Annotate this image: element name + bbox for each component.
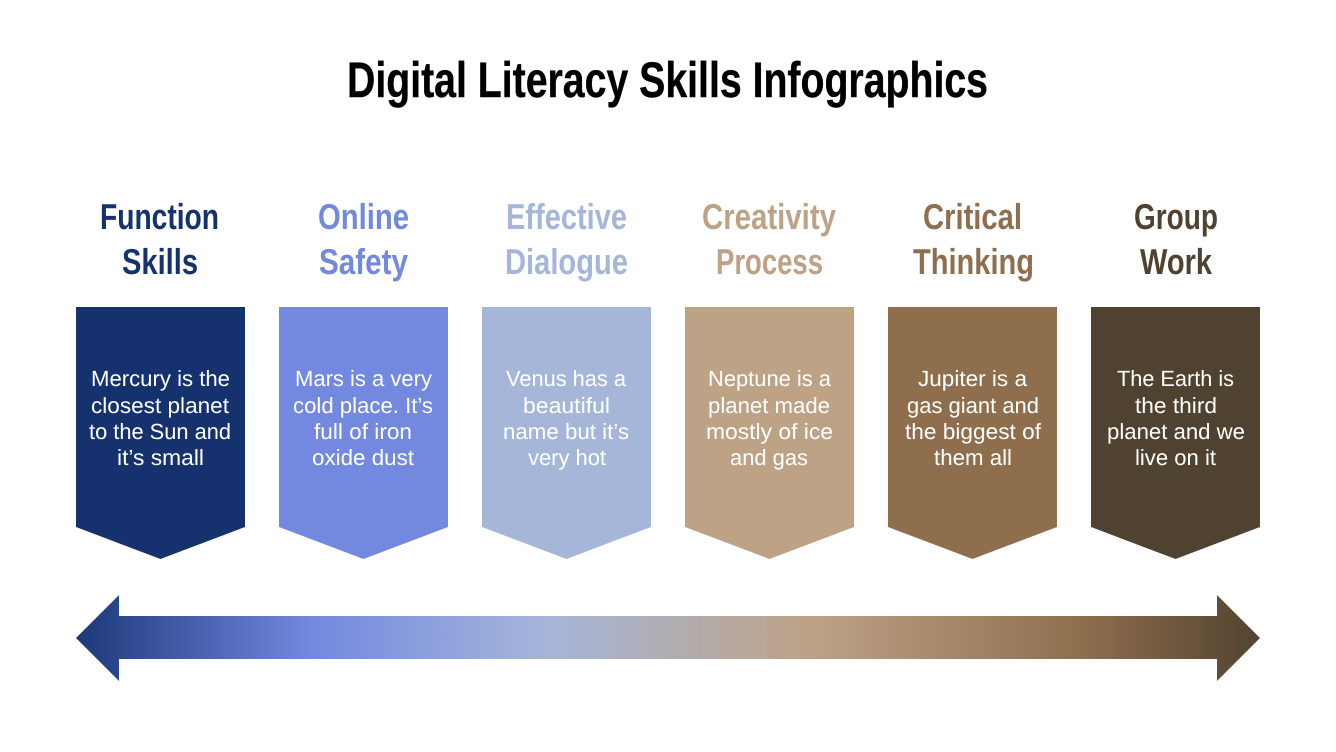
text block: mars: Mars is a very [295, 366, 432, 391]
heading: effective dialogue: Dialogue [505, 241, 628, 282]
heading: online safety: Safety [319, 241, 408, 282]
heading: creativity process: Creativity [702, 196, 836, 237]
heading: creativity process [702, 196, 836, 282]
text block: venus [503, 366, 629, 470]
text block: neptune: Neptune is a [708, 366, 832, 391]
text block: earth: the third [1135, 393, 1217, 418]
text block: jupiter: Jupiter is a [918, 366, 1028, 391]
text block: mercury: to the Sun and [89, 419, 231, 444]
text block: mars: oxide dust [312, 445, 414, 470]
heading: creativity process: Process [716, 241, 823, 282]
text block: venus: name but it’s [503, 419, 629, 444]
text block: venus: very hot [528, 445, 606, 470]
heading: function skills: Skills [122, 241, 198, 282]
card shape: effective dialogue [482, 307, 651, 559]
text block: mercury: it’s small [117, 445, 204, 470]
heading: online safety: Online [318, 196, 409, 237]
text block: venus: Venus has a [506, 366, 627, 391]
heading: function skills: Function [100, 196, 219, 237]
text block: mercury [89, 366, 231, 470]
panel: group work [1091, 196, 1260, 559]
text block: jupiter: them all [934, 445, 1012, 470]
panel: critical thinking [888, 196, 1057, 559]
text block: neptune [706, 366, 833, 470]
text block: jupiter [905, 366, 1042, 470]
title: Digital Literacy Skills Infographics [347, 52, 988, 108]
panel: creativity process [685, 196, 854, 559]
text block: venus: beautiful [523, 393, 610, 418]
heading: critical thinking: Thinking [913, 241, 1034, 282]
heading: online safety [318, 196, 409, 282]
heading: effective dialogue [505, 196, 628, 282]
heading: effective dialogue: Effective [506, 196, 627, 237]
text block: mars: full of iron [314, 419, 412, 444]
text block: mercury: closest planet [91, 393, 229, 418]
text block: mercury: Mercury is the [91, 366, 230, 391]
text block: earth: live on it [1135, 445, 1216, 470]
heading: group work: Group [1134, 196, 1218, 237]
card shape: critical thinking [888, 307, 1057, 559]
text block: neptune: planet made [708, 393, 830, 418]
card shape: creativity process [685, 307, 854, 559]
text block: mars: cold place. It’s [293, 393, 433, 418]
arrow: double-headed gradient [76, 595, 1260, 681]
panel: function skills [76, 196, 245, 559]
text block: earth: planet and we [1107, 419, 1245, 444]
text block: jupiter: the biggest of [905, 419, 1042, 444]
text block: neptune: and gas [730, 445, 808, 470]
panel: online safety [279, 196, 448, 559]
heading: group work: Work [1140, 241, 1213, 282]
panel: effective dialogue [482, 196, 651, 559]
heading: critical thinking [913, 196, 1034, 282]
heading: critical thinking: Critical [923, 196, 1022, 237]
text block: earth [1107, 366, 1245, 470]
text block: earth: The Earth is [1117, 366, 1234, 391]
text block: jupiter: gas giant and [907, 393, 1039, 418]
card shape: online safety [279, 307, 448, 559]
text block: neptune: mostly of ice [706, 419, 833, 444]
heading: function skills [100, 196, 219, 282]
card shape: function skills [76, 307, 245, 559]
text block: mars [293, 366, 433, 470]
card shape: group work [1091, 307, 1260, 559]
heading: group work [1134, 196, 1218, 282]
